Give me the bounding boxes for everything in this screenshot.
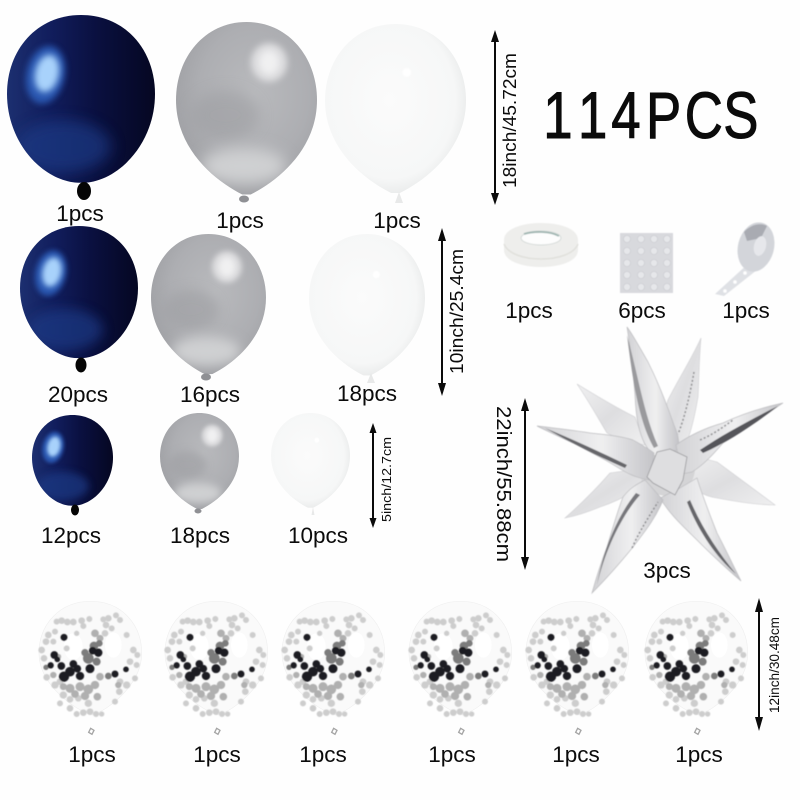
size arrow 5 inch: 5inch/12.7cm	[379, 437, 394, 522]
size arrow 12 inch: 12inch/30.48cm	[766, 617, 782, 713]
icon: glue dots sheet	[620, 233, 673, 293]
size arrow 22 inch: 22inch/55.88cm	[492, 406, 514, 562]
front spikes	[537, 327, 783, 593]
size arrow 12 inch	[755, 598, 782, 731]
confetti balloon 4	[409, 601, 512, 734]
white balloon 18 inch	[325, 24, 466, 203]
label: 1pcs	[216, 208, 264, 233]
accessories	[504, 218, 780, 323]
foil seams and dark reflections	[545, 335, 778, 585]
label: 1pcs	[68, 742, 116, 767]
label: 1pcs	[299, 742, 347, 767]
white balloon 5 inch	[271, 413, 350, 515]
center cone	[647, 449, 687, 495]
icon: ribbon roll	[504, 223, 578, 267]
size arrow 22 inch	[492, 398, 529, 570]
size arrow 5 inch	[370, 423, 394, 528]
silver foil starburst balloon	[537, 327, 783, 593]
label: 1pcs	[428, 742, 476, 767]
label: 6pcs	[618, 298, 666, 323]
title: 114PCS: 114PCS	[543, 78, 758, 152]
label: 20pcs	[48, 382, 108, 407]
silver balloon 5 inch	[160, 413, 239, 514]
silver balloon 10 inch	[151, 234, 266, 380]
label: 1pcs	[193, 742, 241, 767]
label: 12pcs	[41, 523, 101, 548]
row: 18 inch balloons	[7, 15, 466, 233]
size arrow 10 inch	[438, 228, 467, 396]
confetti balloon 5	[526, 601, 629, 734]
label: 1pcs	[56, 201, 104, 226]
label: 18pcs	[337, 381, 397, 406]
navy balloon 18 inch	[7, 15, 155, 200]
label: 1pcs	[505, 298, 553, 323]
label: star quantity: 3pcs	[643, 558, 691, 583]
confetti balloon 1	[39, 601, 142, 734]
row: confetti balloons	[39, 601, 748, 767]
row: 5 inch balloons	[32, 413, 350, 548]
label: 1pcs	[722, 298, 770, 323]
label: 1pcs	[552, 742, 600, 767]
label: 18pcs	[170, 523, 230, 548]
confetti balloon 3	[282, 601, 385, 734]
label: 16pcs	[180, 382, 240, 407]
size arrow 18 inch	[491, 30, 520, 205]
icon: balloon strip roll	[715, 218, 780, 296]
label: 1pcs	[373, 208, 421, 233]
white balloon 10 inch	[309, 234, 425, 383]
silver balloon 18 inch	[176, 22, 317, 202]
star core backing	[639, 440, 695, 496]
navy balloon 10 inch	[20, 226, 138, 372]
back spikes	[565, 338, 775, 518]
confetti balloon 6	[645, 601, 748, 734]
size arrow 18 inch: 18inch/45.72cm	[500, 53, 520, 188]
label: 10pcs	[288, 523, 348, 548]
label: 1pcs	[675, 742, 723, 767]
size arrow 10 inch: 10inch/25.4cm	[447, 249, 467, 374]
row: 10 inch balloons	[20, 226, 425, 407]
confetti balloon 2	[165, 601, 268, 734]
navy balloon 5 inch	[32, 415, 113, 516]
